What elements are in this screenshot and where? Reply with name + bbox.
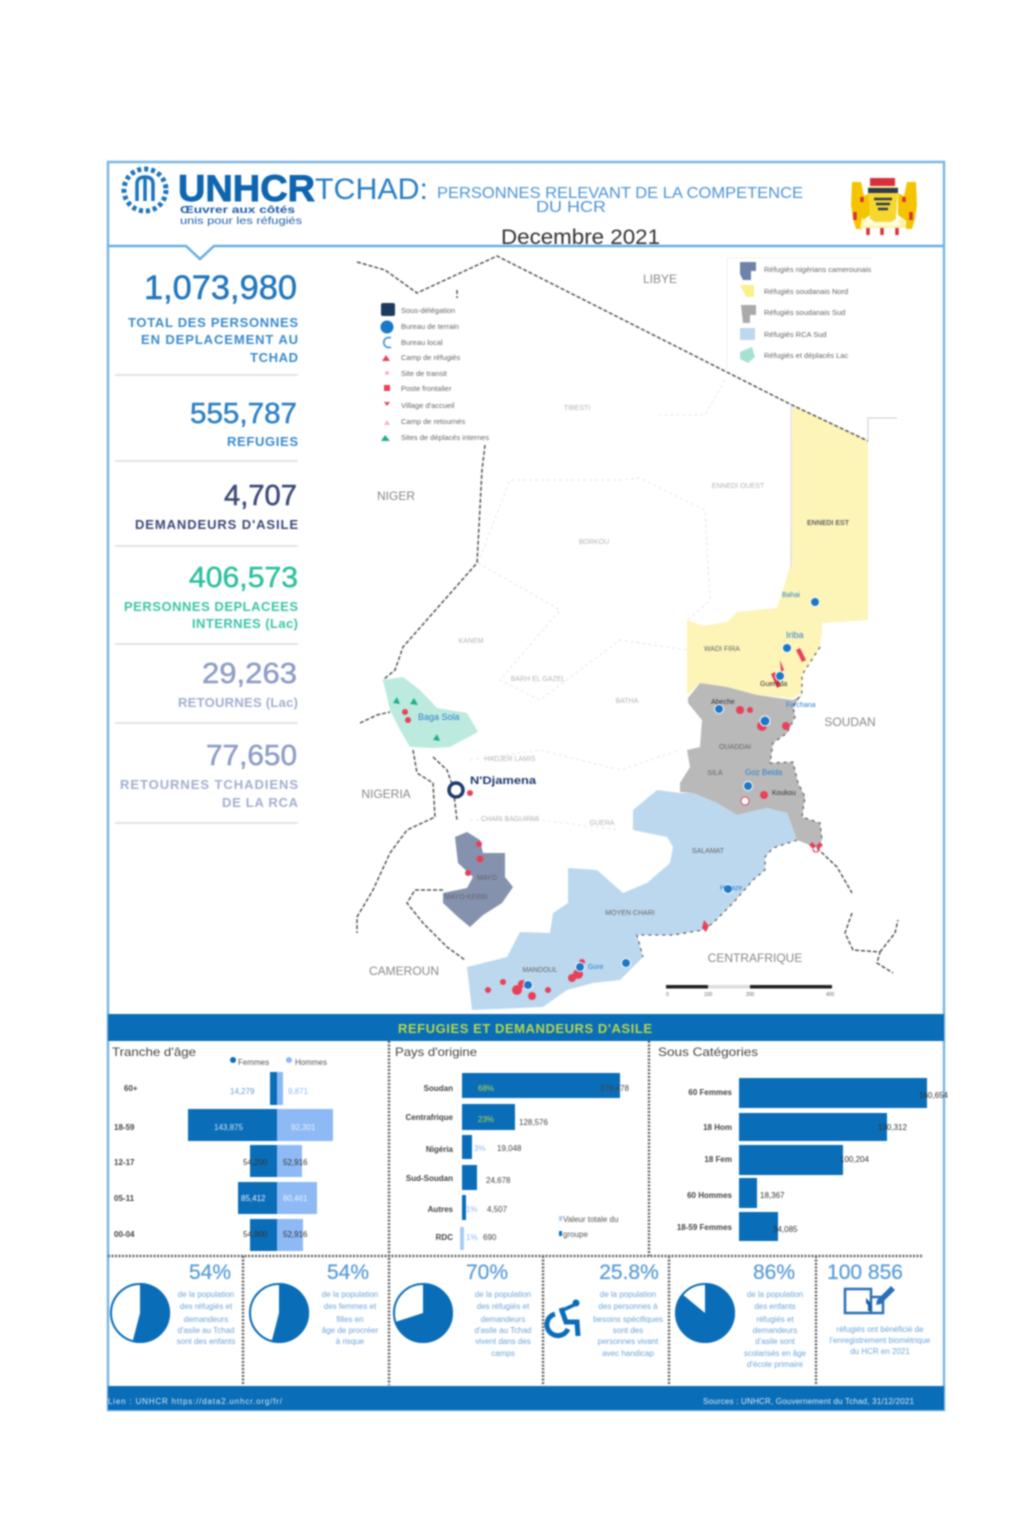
panel: key figures xyxy=(115,269,299,823)
KPI: 86 percent: scolarisés en âge xyxy=(744,1349,807,1358)
region labels: BORKOU xyxy=(579,539,609,546)
chart: country of origin xyxy=(395,1045,629,1250)
legend left: Bureau local xyxy=(401,338,443,347)
town labels: Guereda xyxy=(760,681,787,688)
stat: returnees Lac xyxy=(178,658,298,710)
category labels xyxy=(114,1084,138,1239)
region labels: TIBESTI xyxy=(564,405,590,412)
subtitle: DU HCR xyxy=(536,199,606,216)
tagline xyxy=(180,205,302,227)
stat: total: EN DEPLACEMENT AU xyxy=(141,332,298,347)
town labels: Gore xyxy=(588,964,604,971)
KPI: 86 percent xyxy=(675,1261,807,1369)
KPI: 54 percent women: d'asile au Tchad xyxy=(178,1326,234,1335)
subtitle: PERSONNES RELEVANT DE LA COMPETENCE xyxy=(437,185,803,202)
icon: registration book and pin xyxy=(845,1286,895,1313)
KPI: 86 percent: réfugiés et xyxy=(756,1315,794,1324)
legend left: Bureau de terrain xyxy=(401,322,459,331)
category labels xyxy=(405,1084,454,1242)
N'Djamena capital marker: N'Djamena xyxy=(470,775,537,787)
legend left: Poste frontalier xyxy=(401,384,452,393)
legend right: Réfugiés soudanais Sud xyxy=(764,308,845,317)
KPI: 54 percent girls: de la population xyxy=(322,1290,378,1299)
country labels: CAMEROUN xyxy=(369,964,439,978)
stat: IDPs: 406,573 xyxy=(189,562,298,594)
legend left: Sous-délégation xyxy=(401,306,455,315)
chart dividers xyxy=(108,1041,922,1385)
KPI: 70 percent: 70% xyxy=(466,1261,508,1284)
town labels: Haraze xyxy=(720,885,743,892)
footer bar xyxy=(108,1386,944,1410)
KPI: 70 percent: des réfugiés et xyxy=(477,1302,530,1311)
stat: refugees xyxy=(190,398,298,449)
chart: age pyramid xyxy=(112,1045,333,1251)
values: 24,678 xyxy=(486,1176,511,1185)
chart: country of origin: Pays d'origine xyxy=(395,1045,477,1059)
region labels: KANEM xyxy=(459,638,484,645)
legend: groupe xyxy=(563,1230,588,1239)
KPI: 100 856: 100 856 xyxy=(827,1261,903,1284)
values: 14,279 xyxy=(230,1087,255,1096)
town labels: Baga Sola xyxy=(418,712,460,722)
IDP markers xyxy=(393,697,440,741)
values: 143,875 xyxy=(214,1123,243,1132)
stat: IDPs: INTERNES (Lac) xyxy=(192,616,298,631)
page frame xyxy=(108,162,944,1410)
KPI: 70 percent: camps xyxy=(491,1349,515,1358)
region labels: HADJER LAMIS xyxy=(485,756,536,763)
stat: returnees RCA xyxy=(120,740,299,810)
values: 1% xyxy=(466,1205,478,1214)
country labels: LIBYE xyxy=(643,272,677,286)
values: 379,478 xyxy=(600,1084,629,1093)
country labels: CENTRAFRIQUE xyxy=(708,951,802,965)
labels: 60 Femmes xyxy=(688,1088,733,1097)
KPI: 25.8 percent disability: des personnes à xyxy=(598,1302,658,1311)
KPI: 86 percent: d'asile sont xyxy=(755,1337,796,1346)
KPI: 25.8 percent disability: besoins spécifiques xyxy=(593,1315,663,1324)
values: 85,412 xyxy=(241,1194,266,1203)
stat: returnees Lac: 29,263 xyxy=(202,658,297,690)
values: 92,301 xyxy=(291,1123,316,1132)
values xyxy=(466,1084,629,1242)
values: 19,048 xyxy=(497,1144,522,1153)
region labels: MAYO-KEBBI xyxy=(444,894,488,901)
region labels: MAYO xyxy=(477,875,498,882)
camp markers xyxy=(402,648,823,1000)
subtitle xyxy=(437,185,803,216)
section banner xyxy=(108,1014,944,1041)
chart: age pyramid: Tranche d'âge xyxy=(112,1045,196,1059)
stat: asylum seekers: 4,707 xyxy=(224,480,297,512)
region labels: BARH EL GAZEL xyxy=(511,676,565,683)
KPI: 25.8 percent disability xyxy=(547,1261,663,1358)
category labels: 05-11 xyxy=(114,1194,135,1203)
stat: total: TOTAL DES PERSONNES xyxy=(128,315,298,330)
minor bar xyxy=(460,1227,464,1250)
KPI: 54 percent women: sont des enfants xyxy=(177,1337,235,1346)
scale bar xyxy=(666,985,835,998)
legend left: Camp de retournés xyxy=(401,417,465,426)
town labels: Bahai xyxy=(782,592,800,599)
icon: Chad coat of arms xyxy=(851,178,917,235)
legend right: Réfugiés et déplacés Lac xyxy=(764,351,848,360)
values: 4,507 xyxy=(487,1205,508,1214)
values: 34,085 xyxy=(773,1225,798,1234)
KPI: 86 percent: des enfants xyxy=(754,1302,796,1311)
category labels: 18-59 xyxy=(114,1123,135,1132)
N'Djamena capital marker xyxy=(449,775,537,797)
KPI: 54 percent girls: 54% xyxy=(327,1261,369,1284)
title TCHAD: TCHAD: xyxy=(315,173,428,206)
country labels: SOUDAN xyxy=(824,715,876,729)
stat: returnees RCA: 77,650 xyxy=(206,740,297,772)
region labels: MOYEN CHARI xyxy=(605,910,655,917)
UNHCR office markers xyxy=(524,598,820,990)
KPI: 25.8 percent disability: de la population xyxy=(600,1290,656,1299)
labels: 18 Fem xyxy=(704,1155,732,1164)
category labels: Autres xyxy=(428,1205,454,1214)
tagline: unis pour les réfugiés xyxy=(180,216,302,227)
legend xyxy=(559,1215,618,1239)
town labels: Goz Beida xyxy=(745,768,783,777)
KPI: 86 percent: 86% xyxy=(753,1261,795,1284)
values: 80,461 xyxy=(283,1194,308,1203)
values: 52,916 xyxy=(283,1230,308,1239)
KPI: 100 856: du HCR en 2021 xyxy=(850,1347,910,1356)
region labels: WADI FIRA xyxy=(704,646,740,653)
town labels: Farchana xyxy=(786,702,816,709)
values: 1% xyxy=(466,1233,478,1242)
KPI: 86 percent: de la population xyxy=(747,1290,803,1299)
region: Logone slate xyxy=(443,832,513,927)
values: 23% xyxy=(478,1115,494,1124)
scale bar: 400 xyxy=(826,992,835,998)
stat: asylum seekers xyxy=(135,480,298,532)
KPI: 100 856: réfugiés ont bénéficié de xyxy=(836,1325,924,1334)
values: 128,576 xyxy=(519,1118,548,1127)
values: 54,200 xyxy=(243,1158,268,1167)
stat: asylum seekers: DEMANDEURS D'ASILE xyxy=(135,517,298,532)
map of Chad xyxy=(357,256,898,1010)
stat: returnees RCA: RETOURNES TCHADIENS xyxy=(120,777,298,792)
legend left: Camp de réfugiés xyxy=(401,353,460,362)
category labels: Centrafrique xyxy=(405,1113,454,1122)
scale bar: 200 xyxy=(746,992,755,998)
town labels: Iriba xyxy=(786,630,804,640)
pie xyxy=(111,1283,170,1343)
stat: IDPs xyxy=(124,562,298,631)
labels: 18-59 Femmes xyxy=(677,1223,733,1232)
category labels: 12-17 xyxy=(114,1158,135,1167)
KPI: 54 percent women: de la population xyxy=(178,1290,234,1299)
stat: total xyxy=(128,269,298,365)
labels xyxy=(677,1088,733,1232)
chart: status: Sous Catégories xyxy=(658,1045,758,1059)
KPI: 54 percent women xyxy=(111,1261,235,1346)
category labels: Sud-Soudan xyxy=(406,1174,453,1183)
stat: refugees: 555,787 xyxy=(190,398,297,430)
KPI: 54 percent women: demandeurs xyxy=(184,1315,228,1324)
stat: IDPs: PERSONNES DEPLACEES xyxy=(124,599,298,614)
icon: UNHCR logo xyxy=(124,169,166,211)
legend: Valeur totale du xyxy=(563,1215,618,1224)
legend: Femmes xyxy=(238,1058,269,1067)
values: 690 xyxy=(483,1233,497,1242)
bars xyxy=(739,1078,927,1241)
KPI: 25.8 percent disability: sont des xyxy=(613,1326,643,1335)
internal admin lines xyxy=(470,380,725,830)
region labels: GUERA xyxy=(590,820,615,827)
category labels: Soudan xyxy=(424,1084,453,1093)
legend left: Site de transit xyxy=(401,369,448,378)
stat: total: 1,073,980 xyxy=(144,269,297,307)
legend left: Village d'accueil xyxy=(401,401,455,410)
stat: total: TCHAD xyxy=(250,350,298,365)
KPI: 86 percent: d'école primaire xyxy=(747,1360,804,1369)
values: 52,916 xyxy=(283,1158,308,1167)
stat: returnees RCA: DE LA RCA xyxy=(222,795,299,810)
UNHCR wordmark: UNHCR xyxy=(178,168,315,209)
region labels: OUADDAI xyxy=(719,744,751,751)
country labels: NIGER xyxy=(377,489,415,503)
KPI: 100 856: l'enregistrement biométrique xyxy=(830,1336,931,1345)
region: Lac teal xyxy=(383,677,478,748)
region labels: BATHA xyxy=(616,698,639,705)
region labels: CHARI BAGUIRMI xyxy=(481,816,539,823)
pie xyxy=(250,1283,309,1343)
stat: refugees: REFUGIES xyxy=(227,434,298,449)
region: Sila Ouaddai grey xyxy=(680,683,822,848)
bars xyxy=(188,1072,333,1251)
country labels: NIGERIA xyxy=(361,787,411,801)
header xyxy=(124,168,917,249)
KPI: 100 856 xyxy=(827,1261,931,1356)
KPI: 54 percent girls: filles en xyxy=(336,1315,364,1324)
region labels: MANDOUL xyxy=(522,967,558,974)
date: Decembre 2021 xyxy=(501,226,660,249)
category labels: 60+ xyxy=(124,1084,138,1093)
KPI: 25.8 percent disability: 25.8% xyxy=(599,1261,659,1284)
values: 160,654 xyxy=(919,1091,948,1100)
KPI: 70 percent: de la population xyxy=(475,1290,531,1299)
KPI: 54 percent girls: à risque xyxy=(336,1337,365,1346)
legend: Hommes xyxy=(295,1058,327,1067)
KPI: 70 percent: d'asile au Tchad xyxy=(475,1326,531,1335)
footer bar: Sources : UNHCR, Gouvernement du Tchad, 31/12/2021 xyxy=(703,1397,915,1406)
region labels xyxy=(444,405,850,974)
values xyxy=(214,1087,316,1239)
values: 9,871 xyxy=(288,1087,309,1096)
labels: 18 Hom xyxy=(703,1123,732,1132)
country labels xyxy=(361,272,876,978)
legend left xyxy=(380,303,489,442)
region: South light blue xyxy=(467,790,797,1010)
footer bar: Lien : UNHCR https://data2.unhcr.org/fr/ xyxy=(108,1397,283,1406)
KPI: 70 percent xyxy=(394,1261,531,1358)
chart: status xyxy=(658,1045,948,1241)
pie xyxy=(394,1283,453,1343)
values: 54,900 xyxy=(243,1230,268,1239)
KPI: 54 percent girls: âge de procréer xyxy=(322,1326,379,1335)
category labels: 00-04 xyxy=(114,1230,135,1239)
values: 18,367 xyxy=(760,1191,785,1200)
town labels xyxy=(418,592,816,971)
KPI: 54 percent girls: des femmes et xyxy=(324,1302,377,1311)
KPI: 86 percent: demandeurs xyxy=(753,1326,797,1335)
town labels: Abeche xyxy=(711,699,735,706)
values: 100,204 xyxy=(840,1155,869,1164)
category labels: Nigéria xyxy=(426,1145,454,1154)
values: 3% xyxy=(474,1144,486,1153)
tagline: Œuvrer aux côtés xyxy=(180,205,296,216)
values xyxy=(760,1091,948,1234)
stat: returnees Lac: RETOURNES (Lac) xyxy=(178,695,298,710)
region labels: ENNEDI EST xyxy=(807,520,850,527)
scale bar: 0 xyxy=(666,992,669,998)
legend right xyxy=(727,258,872,370)
KPI: 70 percent: demandeurs xyxy=(481,1315,525,1324)
KPI: 70 percent: vivent dans des xyxy=(475,1337,531,1346)
values: 68% xyxy=(478,1084,494,1093)
legend xyxy=(230,1057,327,1067)
legend right: Réfugiés soudanais Nord xyxy=(764,287,848,296)
region labels: ENNEDI OUEST xyxy=(712,483,765,490)
KPI: 54 percent girls xyxy=(250,1261,379,1346)
international borders xyxy=(357,256,898,973)
KPI: 25.8 percent disability: avec handicap xyxy=(602,1349,654,1358)
town labels: Koukou xyxy=(772,790,796,797)
legend left: Sites de déplacés internes xyxy=(401,433,489,442)
header rule with notch xyxy=(108,246,944,259)
KPI: 54 percent women: 54% xyxy=(189,1261,231,1284)
legend right: Réfugiés RCA Sud xyxy=(764,330,827,339)
category labels: RDC xyxy=(436,1233,453,1242)
KPI: 25.8 percent disability: personnes vivant xyxy=(598,1337,659,1346)
legend right: Réfugiés nigérians camerounais xyxy=(764,265,871,274)
region labels: SALAMAT xyxy=(692,848,725,855)
pie xyxy=(675,1283,735,1343)
section banner: REFUGIES ET DEMANDEURS D'ASILE xyxy=(398,1021,652,1036)
region: Ennedi / Est yellow xyxy=(687,405,868,698)
KPI: 54 percent women: des réfugiés et xyxy=(180,1302,233,1311)
scale bar: 100 xyxy=(704,992,713,998)
labels: 60 Hommes xyxy=(687,1191,733,1200)
region labels: SILA xyxy=(707,770,723,777)
values: 130,312 xyxy=(878,1123,907,1132)
icon: wheelchair xyxy=(547,1300,580,1336)
bars xyxy=(462,1073,620,1220)
